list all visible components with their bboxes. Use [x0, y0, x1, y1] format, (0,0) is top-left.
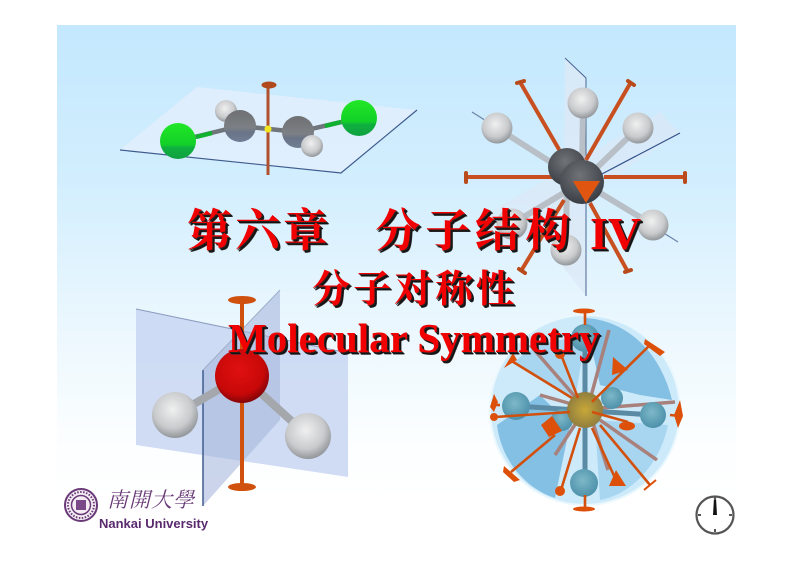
bonds	[497, 103, 653, 250]
subtitle: molecular symmetry in Chinese: 分子对称性	[312, 269, 517, 311]
sphere	[490, 315, 680, 505]
planes	[563, 58, 586, 296]
plane B	[203, 290, 280, 506]
logo text: Nankai University: Nankai University	[99, 516, 208, 531]
subtitle: Molecular Symmetry: Molecular Symmetry	[228, 315, 600, 361]
chlorine atoms	[160, 123, 196, 159]
rotation axis	[266, 87, 270, 175]
title: molecular structure: 分子结构	[375, 206, 575, 256]
plane A	[136, 309, 348, 477]
hydrogen atoms	[215, 100, 237, 122]
sphere segments	[585, 318, 672, 400]
oxygen atom	[215, 349, 269, 403]
axis end markers	[490, 308, 683, 512]
front axes	[492, 312, 680, 509]
atom bonds	[516, 338, 653, 483]
hydrogen atoms	[152, 392, 198, 438]
logo: Nankai University seal	[65, 489, 97, 521]
slide background	[57, 25, 736, 540]
central atoms	[548, 148, 586, 186]
molecule: dichloroethylene with plane and axis	[120, 82, 417, 175]
molecule: octahedral with axes	[466, 58, 685, 296]
back rods	[530, 330, 675, 470]
title: IV: IV	[590, 208, 641, 259]
carbon atoms	[224, 110, 256, 142]
inversion centre	[264, 126, 272, 132]
icon: clock	[696, 496, 734, 534]
mirror plane	[120, 87, 417, 173]
triangle marker	[573, 181, 600, 203]
atoms	[571, 324, 599, 352]
title: chapter: 第六章	[187, 206, 331, 256]
central atom	[567, 392, 603, 428]
logo text: Nankai in Chinese: 南開大學	[107, 488, 195, 512]
bonds	[178, 118, 359, 141]
bonds	[175, 376, 308, 436]
molecule: water with two planes	[136, 290, 348, 506]
axis	[240, 300, 244, 487]
axes	[466, 82, 685, 272]
outer atoms	[568, 88, 598, 118]
molecule: icosahedral sphere with axes	[490, 308, 683, 512]
